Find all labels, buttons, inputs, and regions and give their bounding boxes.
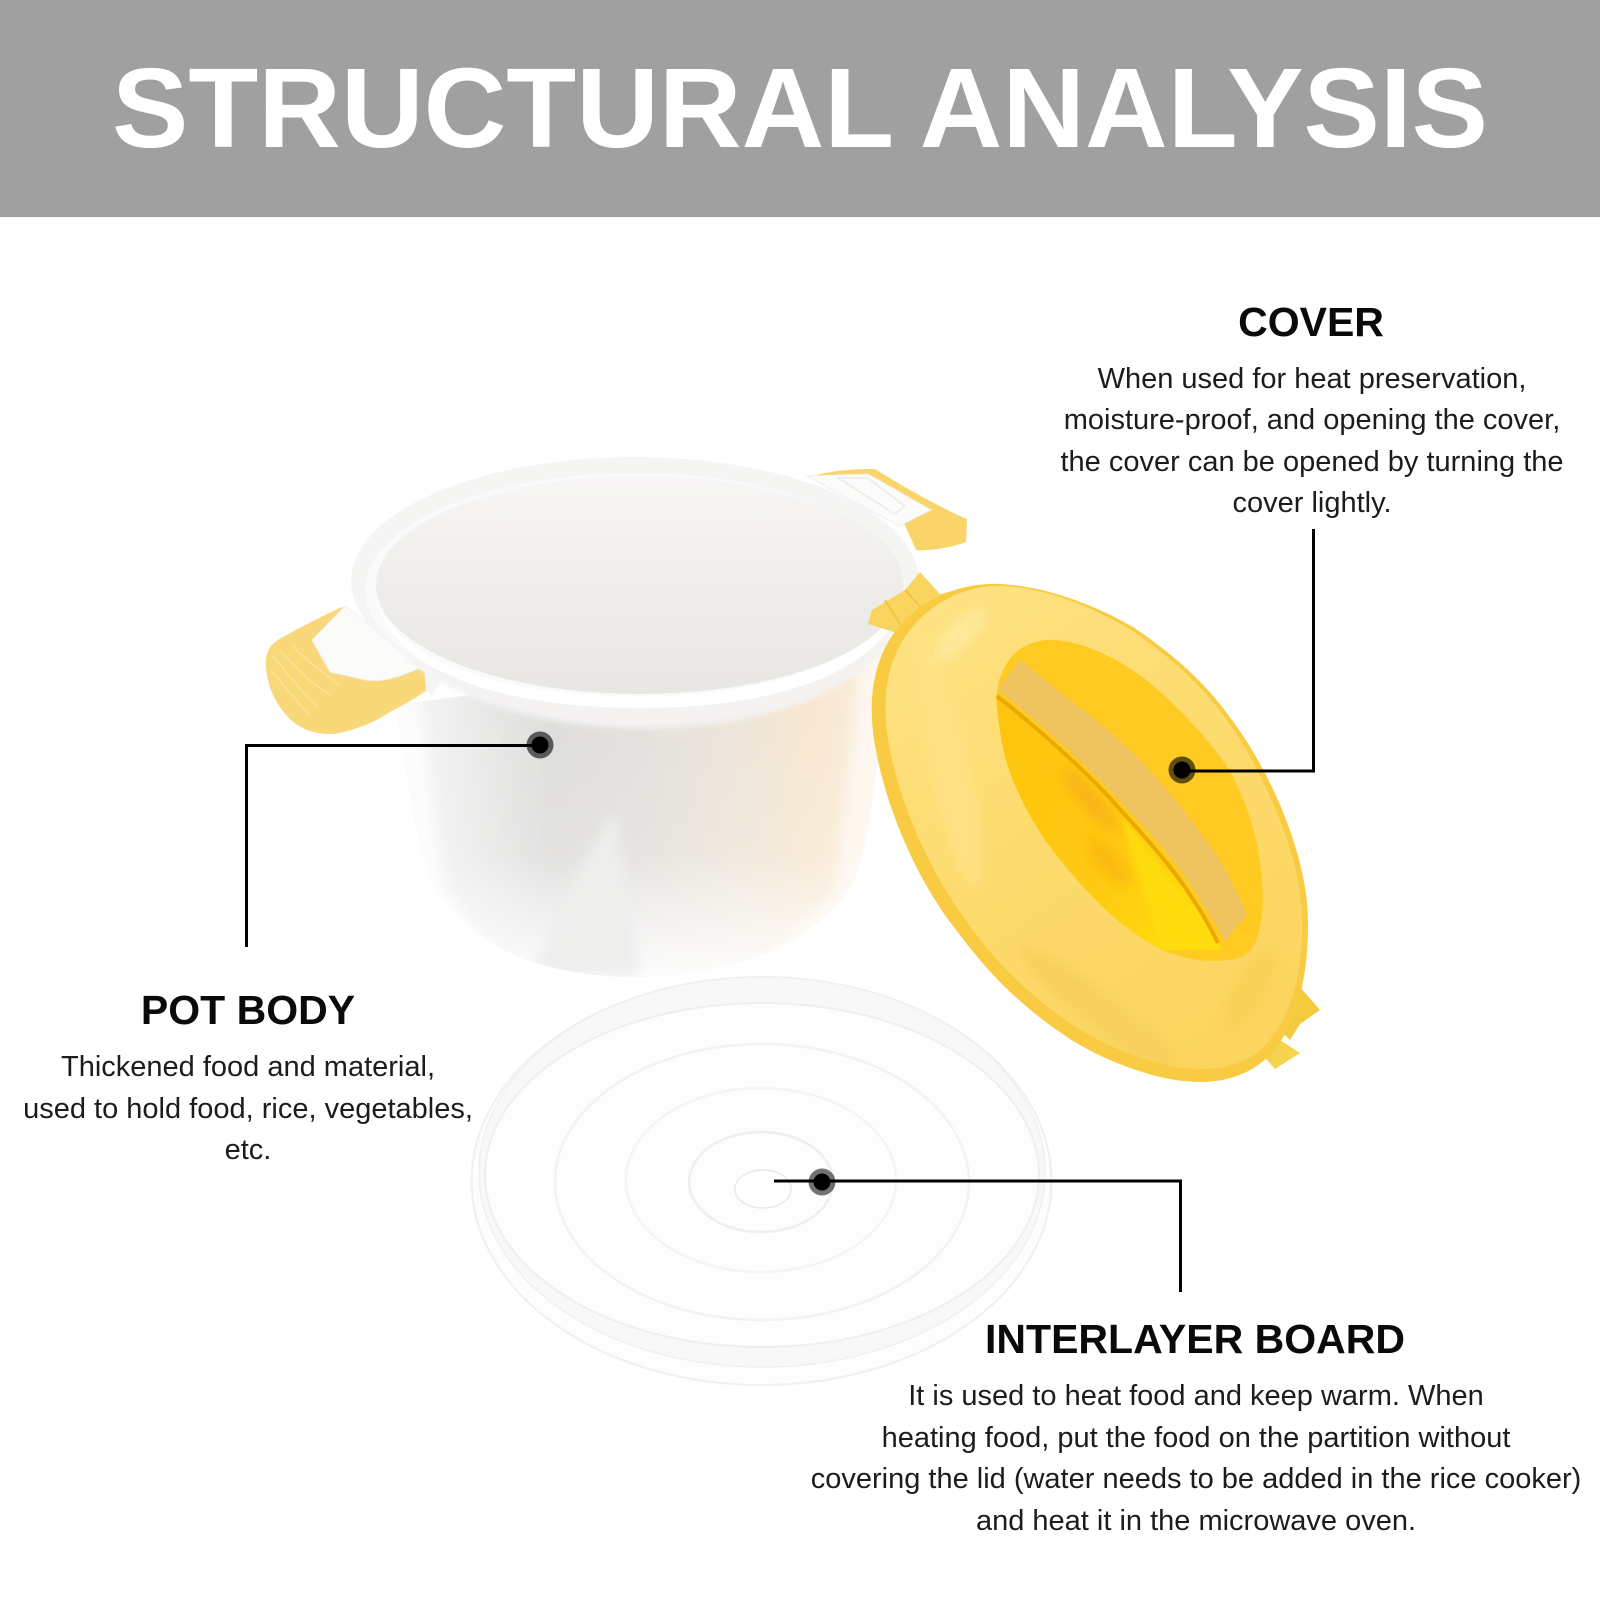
description: pot body: used to hold food, rice, vegetables,	[23, 1093, 473, 1125]
description: interlayer board	[811, 1380, 1581, 1537]
pot wall	[418, 640, 889, 977]
illustration: interlayer board	[472, 977, 1052, 1385]
cover opening	[990, 640, 1263, 961]
description: pot body	[23, 1051, 473, 1166]
description: interlayer board: It is used to heat food and keep warm. When	[908, 1380, 1484, 1412]
callout: interlayer board	[774, 1168, 1581, 1537]
description: interlayer board: heating food, put the food on the partition without	[882, 1422, 1510, 1454]
board surface	[485, 1003, 1039, 1347]
lower clips	[1260, 987, 1320, 1069]
description: interlayer board: and heat it in the microwave oven.	[976, 1505, 1416, 1537]
pot rim	[351, 457, 919, 728]
description: pot body: etc.	[225, 1134, 271, 1166]
illustration: pot body	[266, 457, 967, 980]
board flange	[472, 977, 1052, 1385]
leader line: interlayer board	[774, 1181, 1180, 1292]
ring shading	[901, 602, 1285, 1084]
hinge tab	[868, 572, 977, 636]
concentric ring 1	[555, 1044, 969, 1320]
description: cover: moisture-proof, and opening the cover,	[1064, 404, 1560, 436]
marker dot: cover	[1168, 756, 1196, 784]
description: cover	[1060, 363, 1564, 519]
description: interlayer board: covering the lid (water needs to be added in the rice cooker)	[811, 1463, 1581, 1495]
board rim band	[479, 977, 1045, 1367]
description: pot body: Thickened food and material,	[61, 1051, 435, 1083]
marker dot: interlayer board	[808, 1168, 836, 1196]
description: cover: When used for heat preservation,	[1098, 363, 1526, 395]
leader line: pot body	[246, 746, 540, 947]
description: cover: the cover can be opened by turning the	[1060, 446, 1564, 478]
concentric ring 3	[689, 1132, 833, 1232]
handle shadow	[997, 696, 1218, 943]
heading: interlayer board: INTERLAYER BOARD	[985, 1316, 1405, 1362]
header band	[0, 0, 1600, 217]
cover outer ring	[872, 584, 1308, 1082]
cover dome	[886, 586, 1302, 1069]
leader line: cover	[1182, 529, 1314, 771]
left handle	[266, 606, 440, 734]
callout: cover	[1060, 299, 1564, 784]
marker dot: pot body	[526, 732, 554, 758]
heading: cover: COVER	[1238, 299, 1384, 345]
cover handle bar	[998, 660, 1247, 941]
description: cover: cover lightly.	[1232, 487, 1392, 519]
right handle	[807, 469, 967, 550]
illustration: cover	[868, 572, 1320, 1084]
callout: pot body	[23, 732, 554, 1166]
title: STRUCTURAL ANALYSIS	[112, 45, 1488, 171]
heading: pot body: POT BODY	[141, 987, 355, 1033]
centre hole	[735, 1170, 791, 1208]
concentric ring 2	[626, 1088, 896, 1272]
